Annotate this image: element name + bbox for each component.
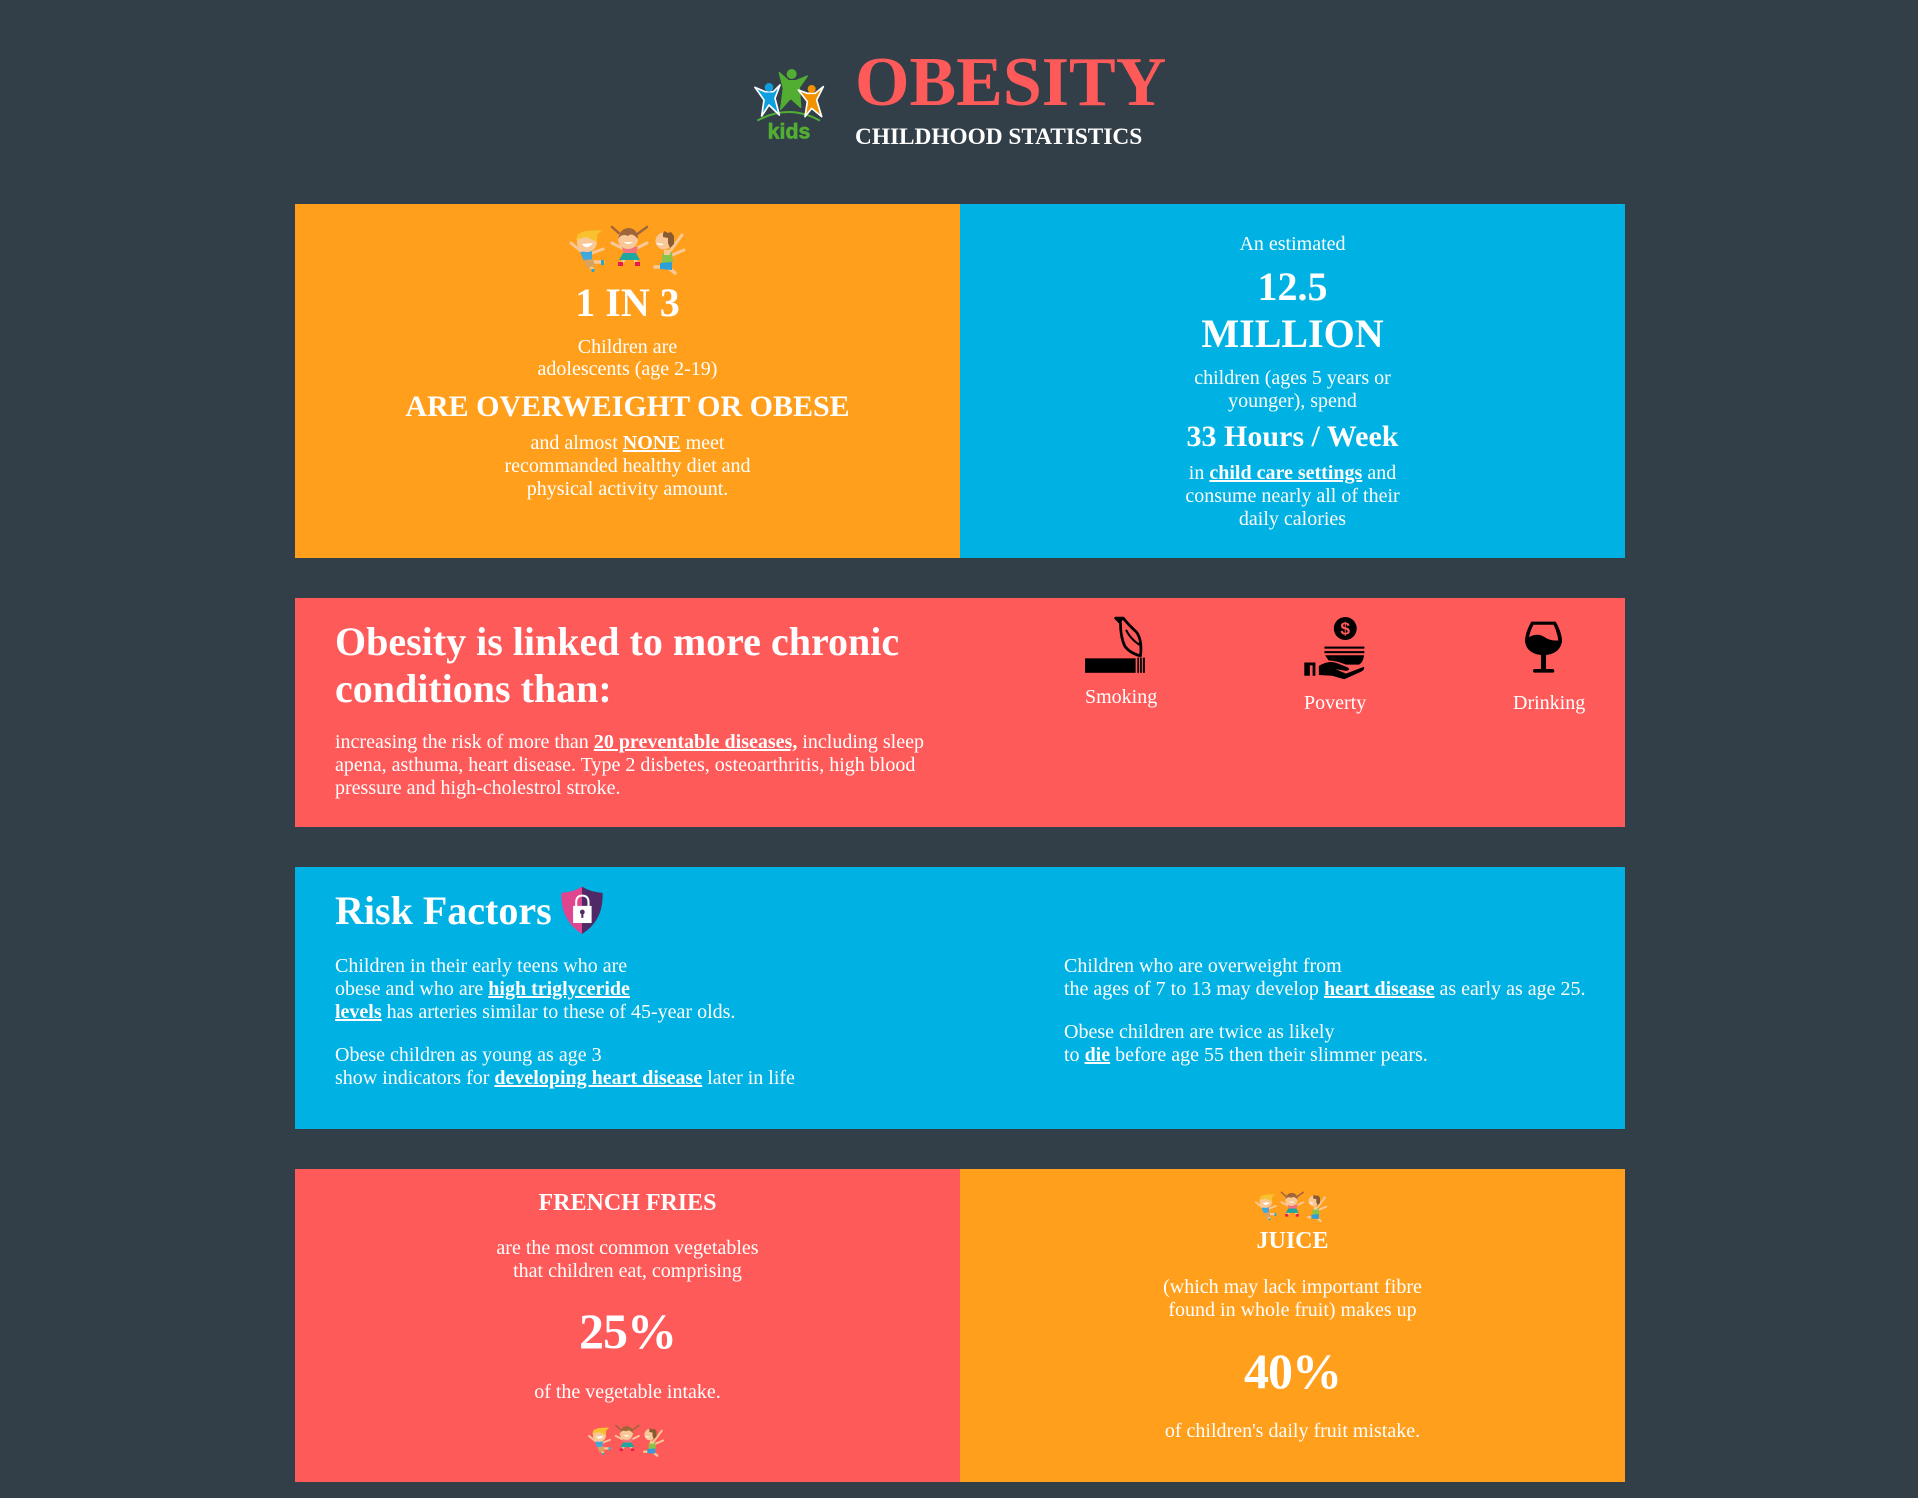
panel: 12.5 million	[960, 204, 1625, 558]
text: early teens: levels has arteries similar to these of 45-year olds.	[335, 1001, 735, 1023]
icon: poverty	[1304, 617, 1366, 714]
text: child care: consume nearly all of their	[1185, 485, 1400, 507]
icon: smoking	[1085, 616, 1157, 708]
header logo: kids	[754, 69, 824, 143]
text: children ages: children (ages 5 years or	[1194, 366, 1391, 388]
text: early teens: Children in their early teens who are	[335, 955, 627, 977]
text block: almost none: and almost NONE meet	[531, 432, 724, 454]
text: risk of diseases	[335, 731, 924, 799]
label: drinking: Drinking	[1513, 692, 1585, 714]
text: fibre: (which may lack important fibre	[1163, 1276, 1422, 1298]
text: ages 7 to 13: the ages of 7 to 13 may develop heart disease as early as age 25.	[1064, 978, 1586, 1000]
icon: drinking	[1513, 622, 1585, 714]
panel: risk factors	[295, 867, 1625, 1129]
icon: three kids	[570, 226, 686, 275]
text: child care: in child care settings and	[1189, 462, 1396, 484]
panel: juice	[960, 1169, 1625, 1482]
stat: 12.5 million: MILLION	[1201, 310, 1384, 356]
heading: juice: JUICE	[1256, 1228, 1329, 1254]
text: an estimated: An estimated	[1239, 233, 1346, 255]
text: common vegetables	[496, 1237, 759, 1282]
text: fruit mistake: of children's daily fruit mistake.	[1165, 1420, 1420, 1442]
icon: shield lock	[561, 886, 603, 934]
text: common vegetables: are the most common vegetables	[496, 1237, 759, 1259]
heading: linked conditions: Obesity is linked to more chronic	[335, 619, 899, 664]
heading: risk factors: Risk Factors	[335, 888, 552, 933]
text: risk of diseases: apena, asthuma, heart disease. Type 2 disbetes, osteoarthritis, high blood	[335, 754, 915, 776]
text: common vegetables: that children eat, comprising	[513, 1260, 742, 1282]
text: risk of diseases: increasing the risk of more than 20 preventable diseases, including sleep	[335, 731, 924, 753]
text: fibre: found in whole fruit) makes up	[1168, 1299, 1417, 1321]
stat: 33 hours: 33 Hours / Week	[1187, 420, 1398, 453]
text: child care	[1185, 462, 1400, 530]
text: twice as likely	[1064, 1021, 1428, 1066]
panel: 1 in 3	[295, 204, 960, 558]
text: twice as likely: to die before age 55 then their slimmer pears.	[1064, 1044, 1428, 1066]
icon: poverty: $	[1340, 619, 1350, 639]
icon: three kids	[588, 1424, 664, 1457]
subtitle: CHILDHOOD STATISTICS	[855, 124, 1142, 150]
text: age 3: Obese children as young as age 3	[335, 1044, 602, 1066]
panel: chronic conditions	[295, 598, 1625, 827]
text: children ages: younger), spend	[1228, 390, 1357, 412]
label: smoking: Smoking	[1085, 686, 1157, 708]
text: early teens: obese and who are high triglyceride	[335, 978, 630, 1000]
text: age 3	[335, 1044, 795, 1089]
stat: 25%: 25%	[579, 1303, 676, 1359]
text: adolescents: adolescents (age 2-19)	[538, 358, 717, 380]
icon: three kids	[1254, 1192, 1328, 1222]
text: children are: Children are	[578, 336, 677, 358]
label: poverty: Poverty	[1304, 692, 1366, 714]
text block: almost none: recommanded healthy diet and	[504, 455, 751, 477]
text: child care: daily calories	[1239, 508, 1346, 530]
text block: almost none: physical activity amount.	[527, 478, 728, 500]
text: fibre	[1163, 1276, 1422, 1321]
text block: almost none	[504, 432, 751, 500]
heading: overweight: ARE OVERWEIGHT OR OBESE	[405, 390, 850, 422]
text: age 3: show indicators for developing heart disease later in life	[335, 1067, 795, 1089]
text: risk of diseases: pressure and high-cholestrol stroke.	[335, 777, 620, 799]
panel: french fries	[295, 1169, 960, 1482]
heading: linked conditions: conditions than:	[335, 666, 612, 711]
text: ages 7 to 13: Children who are overweight from	[1064, 955, 1342, 977]
heading: linked conditions	[335, 619, 899, 711]
text: children ages	[1194, 366, 1391, 412]
stat: 12.5 million	[1201, 264, 1384, 356]
stat: 12.5 million: 12.5	[1258, 264, 1328, 308]
title: OBESITY	[855, 44, 1166, 121]
text: twice as likely: Obese children are twice as likely	[1064, 1021, 1334, 1043]
text: vegetable intake: of the vegetable intake.	[534, 1381, 721, 1403]
text: ages 7 to 13	[1064, 955, 1586, 1000]
header logo: kids: kids	[768, 119, 810, 143]
heading: french fries: FRENCH FRIES	[538, 1190, 717, 1216]
text: early teens	[335, 955, 735, 1023]
stat: 1 in 3: 1 IN 3	[575, 280, 680, 325]
stat: 40%: 40%	[1244, 1343, 1341, 1399]
